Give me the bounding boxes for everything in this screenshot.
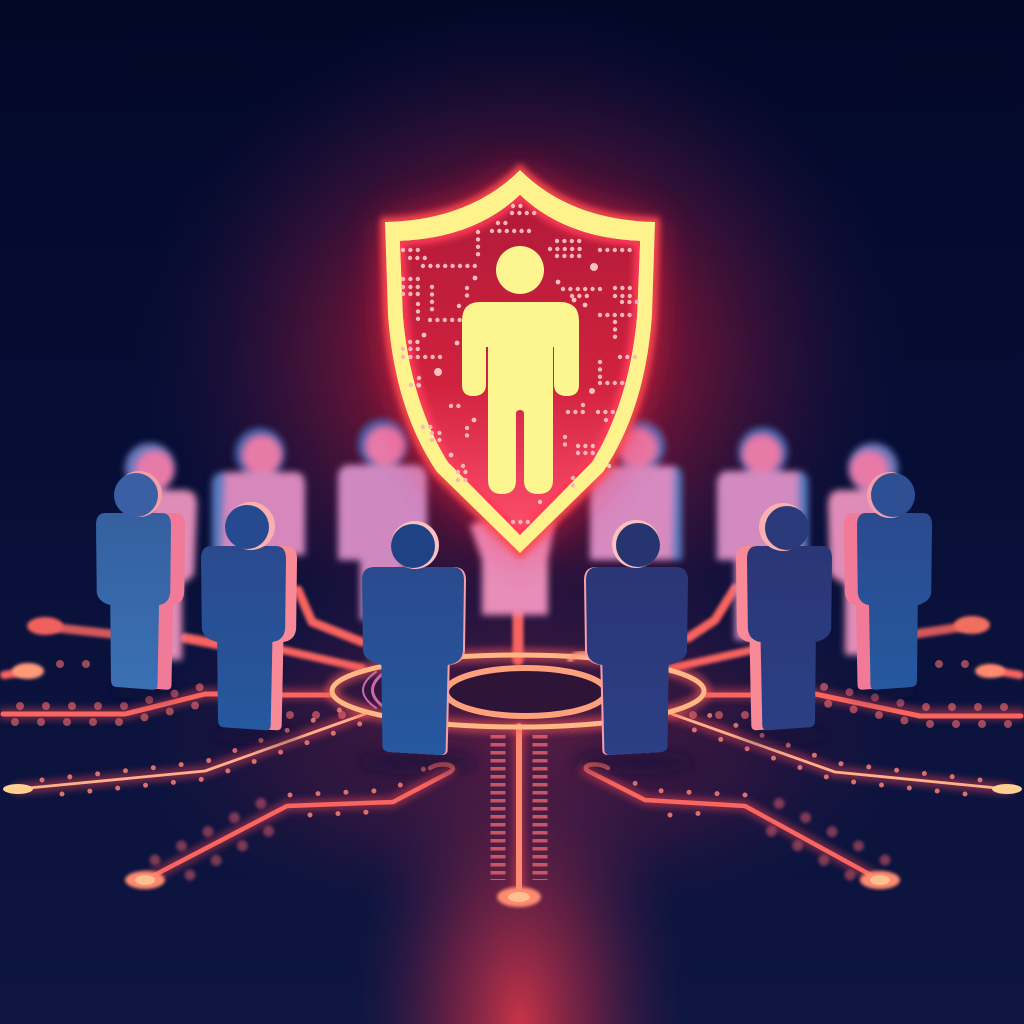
sharp traces right (586, 694, 1021, 880)
figure: back far right (828, 443, 898, 655)
thin bright trace right (672, 714, 1007, 789)
small dots along thin traces (42, 708, 980, 815)
front figure: far left (96, 471, 185, 690)
circuit glow underlay (4, 694, 1020, 895)
floor shadows under front figures (102, 685, 923, 774)
central dash columns (498, 735, 540, 880)
thin bright trace left (18, 714, 365, 789)
shield with person icon (385, 170, 655, 553)
back row of blurred figures (125, 419, 898, 660)
shield glow (385, 170, 655, 553)
trace dots (15, 664, 1008, 724)
sharp traces left (3, 694, 453, 880)
circuit floor (3, 588, 1022, 907)
shield frame (385, 170, 655, 553)
front figure: right (736, 503, 832, 730)
central hub rings (332, 653, 704, 727)
figure: back far left (125, 443, 197, 660)
blurred dots near front traces (155, 796, 885, 875)
glowing end nodes (3, 616, 1022, 907)
person icon (462, 246, 579, 494)
front figure: left (201, 502, 297, 730)
loose node dots on shield (422, 263, 611, 504)
front figure: centre right (584, 520, 688, 755)
shield inner edge glow (400, 195, 640, 535)
front figure: far right (844, 472, 932, 690)
blurred far traces (4, 588, 1020, 675)
figure: back centre right (590, 421, 682, 560)
figure: back centre left (338, 419, 427, 620)
front figure: centre left (362, 521, 466, 755)
central vertical trace (516, 726, 522, 895)
figure: back right (717, 427, 808, 640)
shield inner panel (400, 195, 640, 535)
figure: back centre (470, 520, 555, 615)
circuit dots on shield (403, 206, 637, 522)
figure: back left (212, 428, 305, 555)
